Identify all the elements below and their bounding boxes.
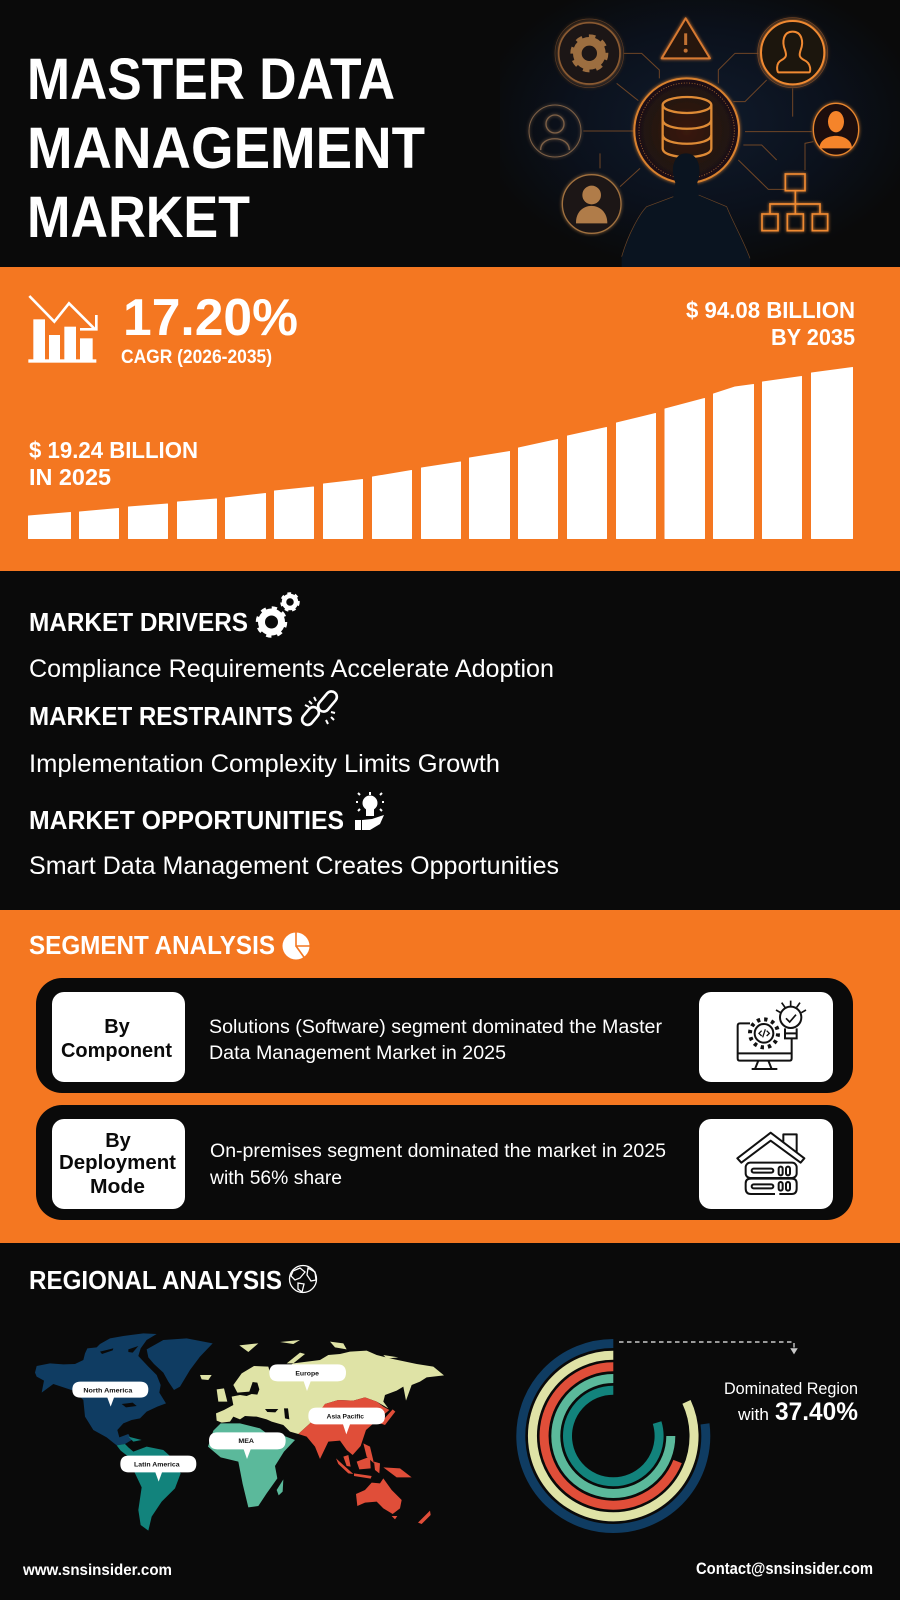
icon: bar chart with arrow [28,296,96,363]
map label: europe [269,1364,346,1391]
segment card: by deployment mode [36,1105,853,1220]
icon: house with server [737,1133,804,1194]
2025 value label: $ 19.24 BILLION [29,437,198,463]
restraint text: Implementation Complexity Limits Growth [29,750,500,778]
label: by component: Component [61,1040,172,1062]
dark lakes and seas on map [100,1346,289,1419]
panel: market size and growth [0,267,900,571]
panel: segment analysis [0,910,900,1243]
2025 value label [29,437,198,490]
label: by deployment mode: By [105,1130,132,1152]
market opportunities heading: MARKET OPPORTUNITIES [29,805,344,835]
description: by deployment mode: with 56% share [209,1168,342,1189]
map label: latin america: Latin America [134,1461,180,1468]
icon: hand with light bulb [355,792,384,830]
market restraints heading: MARKET RESTRAINTS [29,701,293,731]
2025 value label: IN 2025 [29,464,111,490]
map region: latin america [117,1437,181,1531]
market drivers heading: MARKET DRIVERS [29,607,248,637]
arrow: dashed leader to dominated region [619,1342,796,1353]
map label: latin america [120,1456,196,1482]
description: by deployment mode [209,1141,666,1189]
description: by component: Solutions (Software) segment dominated the Master [209,1017,663,1038]
header title: MARKET [27,185,250,250]
label: by deployment mode [59,1130,176,1198]
header title [27,47,425,250]
map label: asia pacific [308,1408,385,1434]
driver text: Compliance Requirements Accelerate Adoption [29,655,554,683]
label: by deployment mode: Mode [90,1176,145,1198]
footer website: www.snsinsider.com [22,1562,172,1579]
2035 value label: $ 94.08 BILLION [686,297,855,323]
opportunity text: Smart Data Management Creates Opportunities [29,852,559,880]
segment card: by component [36,978,853,1093]
description: by deployment mode: On-premises segment dominated the market in 2025 [210,1141,666,1162]
segment analysis heading: SEGMENT ANALYSIS [29,930,275,960]
dominated region callout [724,1379,858,1426]
2035 value label [686,297,855,350]
CAGR figure: CAGR (2026-2035) [121,347,272,368]
label: by component: By [104,1016,131,1038]
map region: middle east and africa [208,1423,295,1507]
dominated region callout: Dominated Region [724,1379,858,1398]
dominated region callout: with [737,1405,769,1424]
map label: north america [72,1382,148,1407]
footer contact: Contact@snsinsider.com [696,1559,873,1578]
header title: MANAGEMENT [27,116,425,181]
map label: mea: MEA [238,1438,254,1445]
map label: mea [209,1432,286,1459]
description: by component: Data Management Market in 2025 [209,1043,506,1064]
map label: asia pacific: Asia Pacific [327,1414,364,1421]
icon: broken chain [300,689,339,727]
hero illustration: data network [500,0,900,267]
market restraints heading [29,689,339,731]
description: by component [209,1017,663,1064]
CAGR figure: 17.20% [123,289,298,347]
icon: monitor with gear and bulb [738,1001,806,1069]
map label: europe: Europe [295,1371,319,1378]
map region: asia pacific [298,1397,431,1524]
map label: north america: North America [83,1387,133,1394]
icon: pie chart [282,931,312,960]
header title: MASTER DATA [27,47,395,112]
radial bar chart: regional share [521,1344,706,1528]
bar chart: market growth [28,368,852,538]
regional analysis heading: REGIONAL ANALYSIS [29,1265,282,1295]
market opportunities heading [29,792,384,835]
map region: north america [35,1333,213,1445]
icon: globe [290,1266,316,1292]
world map [35,1333,444,1531]
map region: europe and north asia [200,1340,444,1434]
market drivers heading [29,594,298,637]
icon: gears [258,594,298,636]
label: by deployment mode: Deployment [59,1152,176,1174]
dominated region callout: 37.40% [775,1398,858,1426]
label: by component [61,1016,172,1062]
2035 value label: BY 2035 [771,324,855,350]
